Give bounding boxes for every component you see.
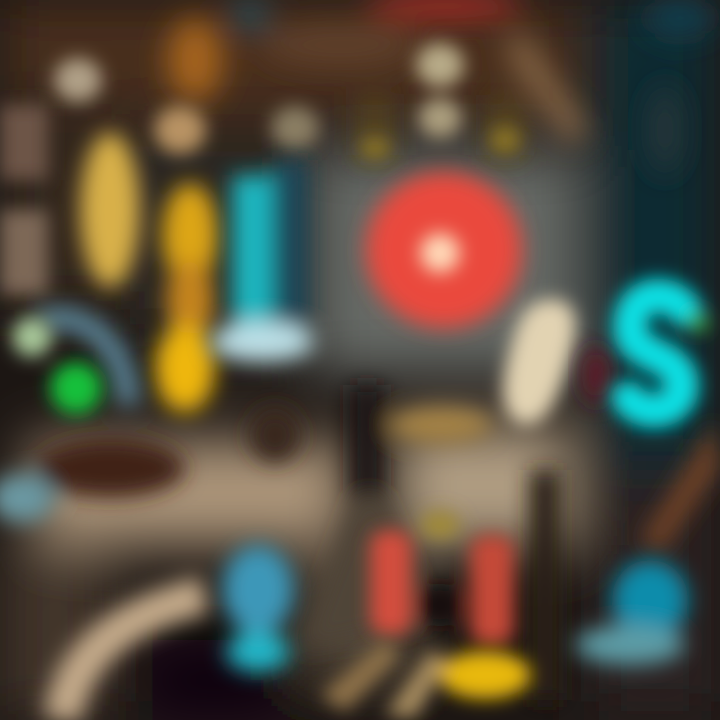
bottom red pair — [370, 511, 514, 645]
yellow lamp column — [80, 132, 218, 412]
white capsule — [503, 299, 576, 425]
bottom cyan lights — [222, 545, 688, 672]
maroon glow — [582, 345, 610, 405]
left green and blue lights — [0, 318, 185, 522]
top warm lights — [167, 0, 715, 175]
cyan letter shape — [210, 160, 314, 362]
bottom left curved table — [62, 595, 205, 720]
right post — [530, 420, 720, 700]
central dark figure — [249, 385, 492, 650]
left wall frames — [0, 105, 48, 295]
red circle — [366, 172, 522, 328]
neon cyan S — [628, 296, 709, 411]
bottom yellow and tan shapes — [320, 640, 531, 718]
green lamp and pale lamp — [12, 317, 102, 414]
small lamps — [54, 43, 520, 159]
